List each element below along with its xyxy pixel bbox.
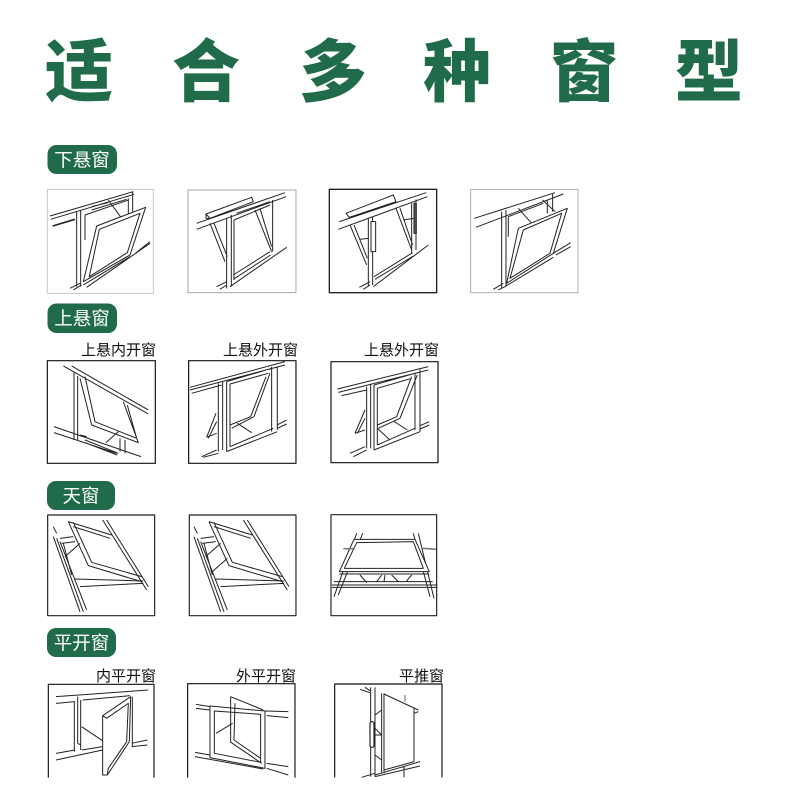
heading: casement windows (47, 628, 116, 657)
icon: top-hung outward window 2 (331, 362, 438, 463)
icon: skylight 1 (48, 515, 155, 616)
icon: casement outward window (188, 684, 295, 778)
heading: top-hung windows (48, 304, 117, 333)
title: 种 (423, 35, 491, 111)
icon: skylight 3 (331, 515, 437, 616)
label: sliding window: 平推窗 (399, 667, 444, 685)
label: top-hung outward 2: 上悬外开窗 (364, 341, 439, 359)
title: 适 (45, 35, 113, 111)
heading: skylights (47, 481, 115, 510)
icon: bottom-hung window 2 (188, 190, 296, 293)
label: casement inward: 内平开窗 (96, 667, 156, 685)
heading: top-hung windows: 上悬窗 (54, 308, 110, 329)
title: 型 (675, 35, 743, 111)
label: top-hung inward 1: 上悬内开窗 (81, 341, 156, 359)
label: casement outward: 外平开窗 (236, 667, 296, 685)
title: 合 (172, 35, 240, 111)
title (45, 35, 743, 111)
icon: top-hung inward window (47, 361, 155, 463)
icon: sliding window (335, 684, 442, 777)
label: top-hung outward 1: 上悬外开窗 (223, 341, 298, 359)
heading: casement windows: 平开窗 (54, 632, 109, 654)
title: 窗 (550, 35, 618, 111)
icon: bottom-hung window 4 (471, 189, 578, 293)
title: 多 (299, 35, 367, 111)
heading: bottom-hung windows: 下悬窗 (54, 150, 110, 170)
icon: skylight 2 (189, 515, 296, 616)
heading: bottom-hung windows (48, 145, 117, 174)
icon: casement inward window (48, 684, 154, 778)
icon: top-hung outward window 1 (189, 361, 296, 463)
heading: skylights: 天窗 (62, 486, 100, 506)
icon: bottom-hung window 3 (329, 189, 437, 293)
icon: bottom-hung window 1 (47, 189, 153, 293)
